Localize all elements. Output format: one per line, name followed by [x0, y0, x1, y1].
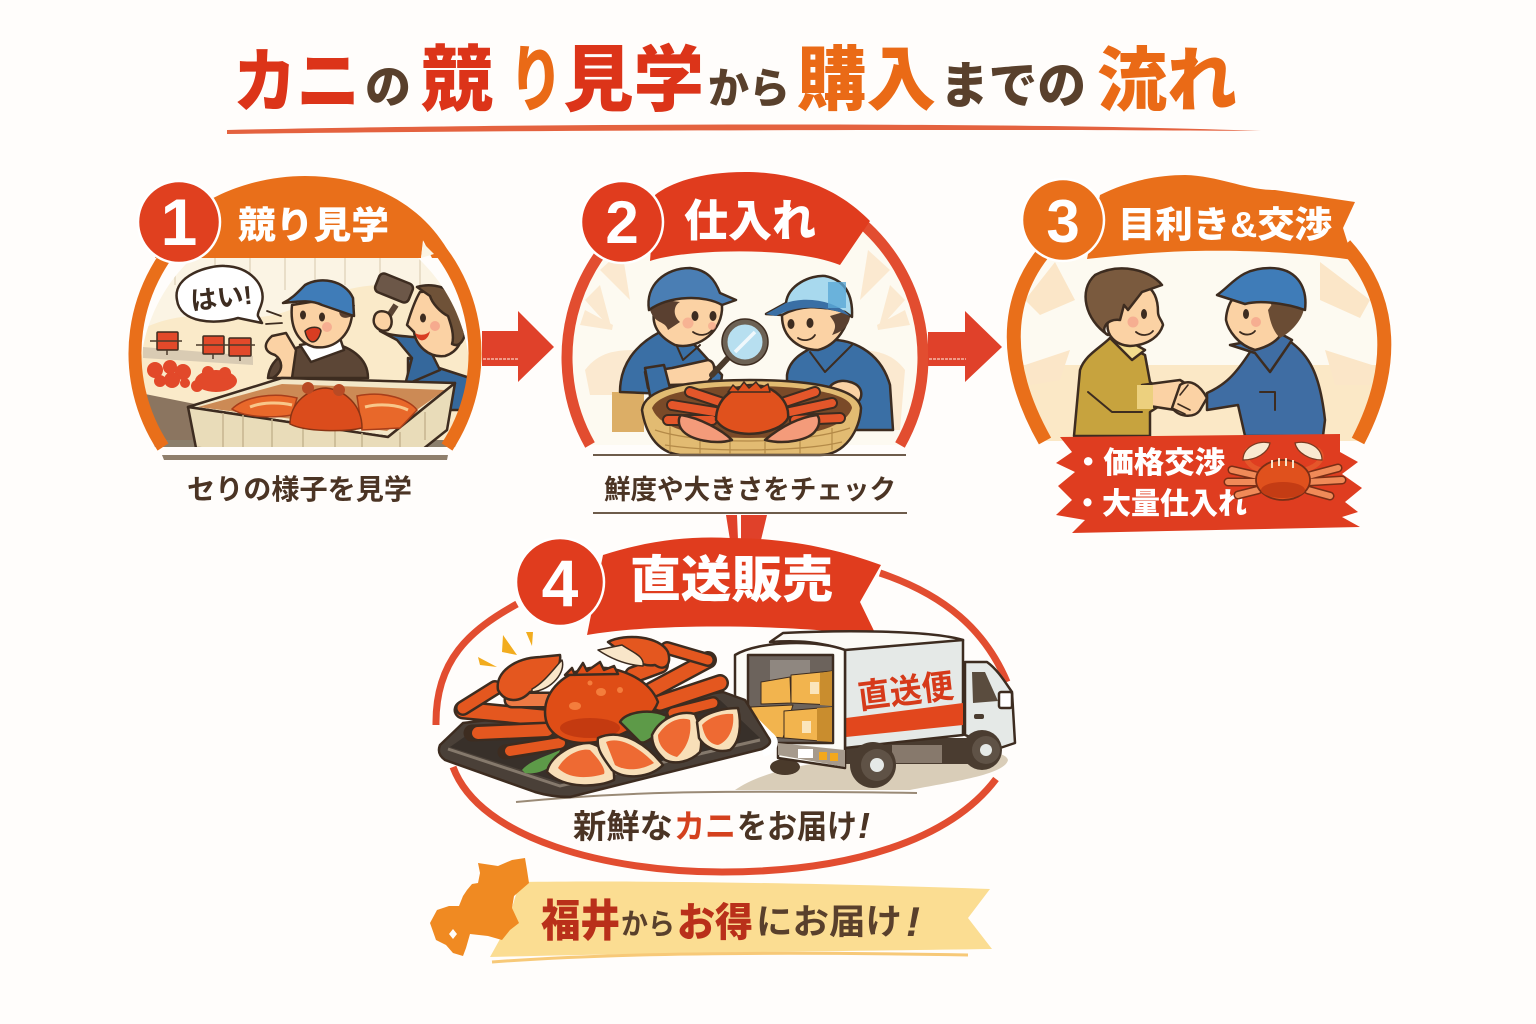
step 4 heading: 直送販売	[630, 552, 833, 608]
step 1 caption: セりの様子を見学	[187, 474, 412, 505]
crab shell	[545, 668, 658, 743]
ribbon crab	[1228, 442, 1342, 500]
ribbon text: 福井	[541, 897, 620, 946]
step 3 red ribbon	[1056, 434, 1362, 533]
step 4 header banner	[587, 538, 881, 637]
step 3 badge: 3	[1046, 188, 1080, 255]
speech bubble: はい!	[189, 280, 254, 316]
seller in blue uniform	[1207, 268, 1325, 436]
basket with crab	[642, 380, 861, 455]
truck bumper and lights	[778, 743, 845, 767]
speech bubble	[177, 266, 282, 324]
step 4 badge	[516, 538, 604, 626]
crab meat pieces	[547, 708, 740, 785]
ribbon text: から	[621, 909, 675, 941]
delivery truck: 直送便	[856, 667, 956, 717]
yellow ribbon	[490, 881, 992, 957]
arrow 2 to 3	[928, 311, 1002, 382]
rear door opening	[735, 643, 845, 768]
step 4 badge: 4	[542, 546, 579, 620]
scene background	[1021, 251, 1377, 441]
ground shadow	[735, 751, 1008, 790]
title underline	[227, 124, 1261, 134]
step 4 caption	[573, 805, 870, 846]
title: から	[708, 65, 790, 112]
buyer in khaki jacket	[1074, 268, 1205, 436]
step 2 badge: 2	[605, 189, 639, 256]
worker in cap shouting	[266, 280, 368, 378]
step 3 ring	[1014, 245, 1384, 441]
step 2 ring	[567, 179, 923, 445]
step 3 heading: 目利き&交渉	[1118, 204, 1332, 245]
step 4 caption: !	[858, 805, 870, 846]
step 3 red ribbon: ・大量仕入れ	[1073, 488, 1247, 521]
oval ring	[436, 573, 1007, 872]
truck wheels	[850, 730, 1002, 788]
left claw	[498, 655, 560, 700]
sparkle marks	[478, 632, 533, 667]
caption rules	[593, 455, 907, 513]
ribbon text	[541, 897, 920, 946]
step 3 header banner	[1087, 175, 1355, 260]
bottom ribbon	[430, 858, 992, 962]
crab platter	[439, 637, 772, 797]
ribbon bullets: ・価格交渉	[1073, 447, 1225, 480]
right claw	[608, 637, 669, 668]
step 2 heading: 仕入れ	[684, 197, 816, 246]
crate	[612, 392, 644, 432]
step 1 badge	[138, 181, 220, 263]
scene background	[572, 232, 918, 445]
step 4 panel	[436, 538, 1015, 872]
step 1 header banner	[155, 176, 452, 258]
auction tray with crab	[188, 378, 455, 457]
left worker with magnifier	[620, 268, 736, 396]
title: までの	[940, 58, 1086, 114]
title: カニ	[233, 43, 360, 121]
arrow 1 to 2	[482, 311, 554, 382]
step 4 caption: をお届け	[737, 808, 857, 845]
step 1 panel	[120, 170, 490, 505]
tray crab	[232, 382, 417, 431]
step 4 caption: 新鮮な	[573, 808, 673, 845]
ribbon text: お得	[677, 901, 753, 945]
title: 流れ	[1097, 42, 1237, 120]
map of Fukui	[430, 858, 529, 956]
step 3 badge	[1022, 179, 1104, 261]
delivery truck	[735, 631, 1015, 788]
step 2 panel	[560, 172, 930, 540]
shelf price tags	[150, 332, 255, 361]
basket crab	[668, 382, 840, 442]
connector to step 4	[726, 515, 767, 540]
right worker	[766, 276, 893, 430]
handshake	[1172, 382, 1207, 416]
base line	[162, 455, 448, 460]
truck cab	[965, 662, 1015, 748]
crab legs	[463, 648, 720, 752]
title: 見学	[563, 41, 704, 121]
title	[233, 41, 1237, 121]
step 2 badge	[581, 181, 663, 263]
crab piles	[147, 360, 237, 392]
cargo box side	[845, 638, 963, 748]
title: の	[365, 61, 411, 113]
ribbon text: にお届け	[756, 903, 902, 942]
lettuce	[620, 712, 667, 743]
step 2 header banner	[650, 172, 870, 265]
worker with hammer	[374, 272, 470, 410]
title: り	[509, 41, 563, 121]
step 1 heading: 競り見学	[238, 205, 389, 246]
title: 競	[421, 41, 493, 121]
platter	[723, 692, 772, 751]
step 2 caption: 鮮度や大きさをチェック	[604, 475, 896, 505]
step 1 ring	[135, 184, 475, 447]
step 4 caption: カニ	[674, 808, 736, 845]
step 3 panel	[1000, 175, 1400, 533]
scene background	[142, 258, 468, 447]
magnifying glass	[712, 319, 768, 375]
step 1 badge: 1	[161, 185, 197, 259]
ribbon text: !	[906, 898, 920, 945]
cargo boxes	[751, 671, 832, 742]
truck wheels under body	[770, 759, 800, 775]
title: 購入	[797, 41, 936, 119]
